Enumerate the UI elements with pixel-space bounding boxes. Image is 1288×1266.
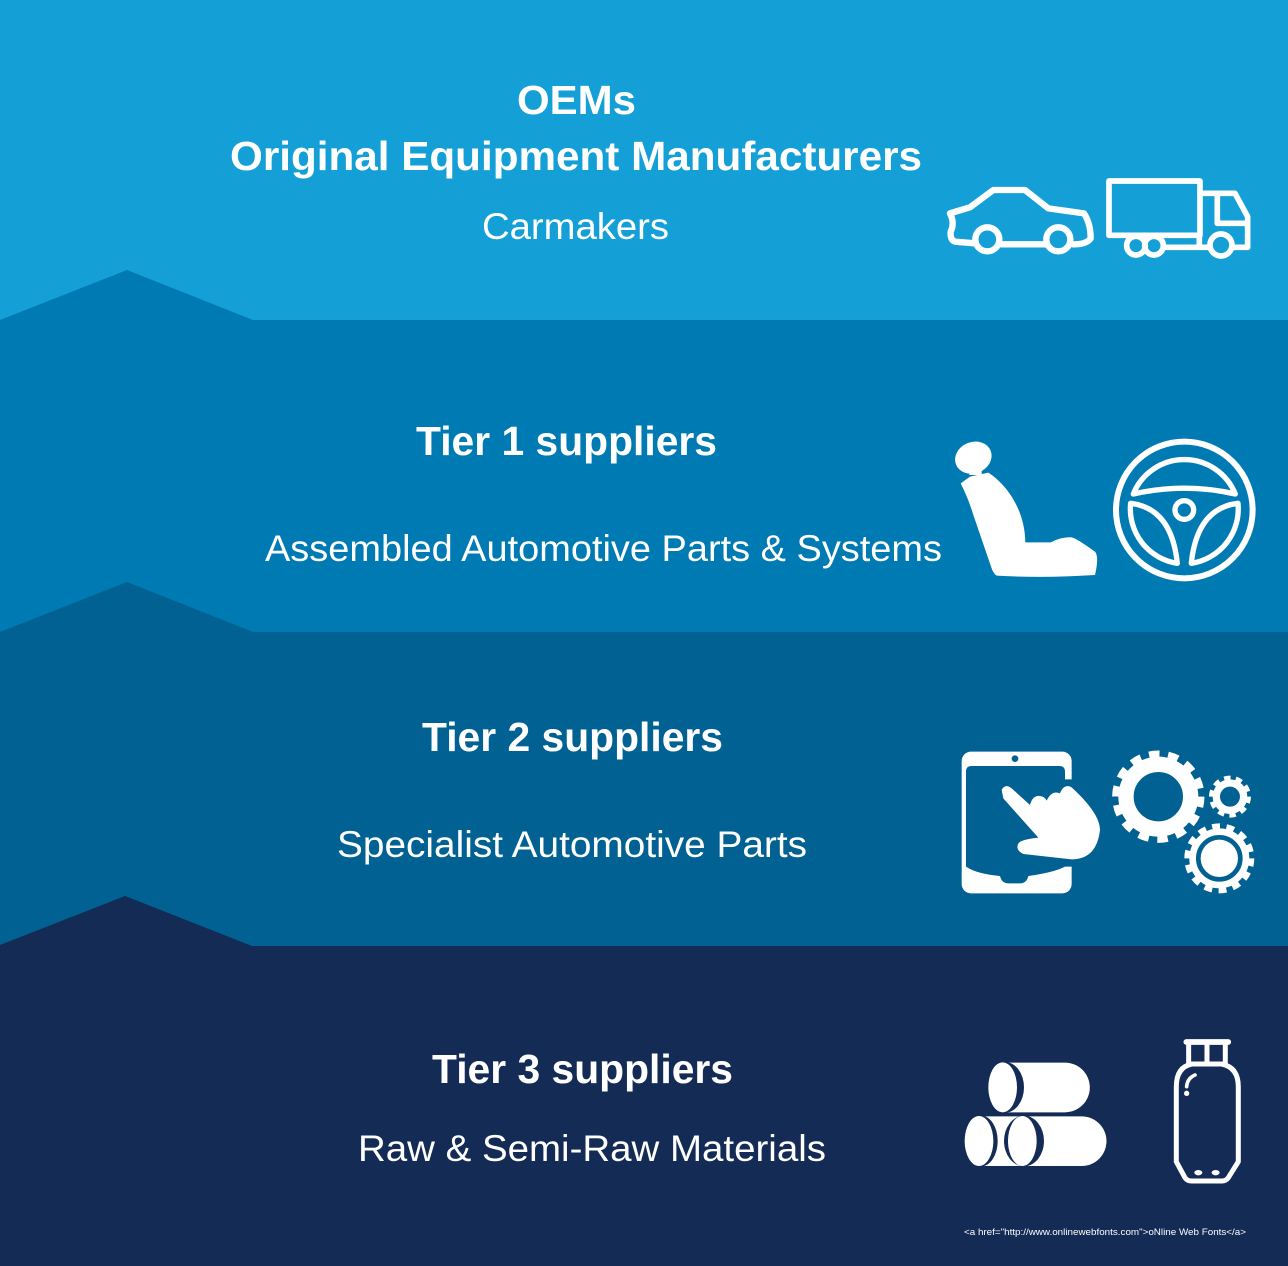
icon: steering wheel (1116, 442, 1253, 578)
text: Raw & Semi-Raw Materials: Raw & Semi-Raw Materials (358, 1128, 826, 1169)
band: Tier 1 background (0, 270, 1288, 640)
icon: tablet with pointing hand (962, 752, 1100, 893)
text: Carmakers: Carmakers (482, 206, 669, 247)
panel: Tier 1 suppliers (0, 270, 1288, 640)
heading: OEMs: OEMs (517, 77, 636, 123)
heading: Tier 3 suppliers: Tier 3 suppliers (432, 1046, 733, 1092)
text: icon credit: <a href="http://www.onlinewebfonts.com">oNline Web Fonts</a> (964, 1227, 1246, 1238)
icon: truck (1109, 181, 1248, 256)
panel: OEMs (0, 0, 1288, 330)
panel: Tier 3 suppliers (0, 896, 1288, 1266)
band: Tier 2 background (0, 582, 1288, 950)
heading: Original Equipment Manufacturers: Original Equipment Manufacturers (230, 133, 922, 179)
icon: car seat (950, 436, 1097, 577)
icon: metal cylinders (965, 1062, 1106, 1166)
icon: car (950, 190, 1091, 251)
panel: Tier 2 suppliers (0, 582, 1288, 950)
icon: gas bottle (1176, 1042, 1238, 1181)
band: Tier 3 background (0, 896, 1288, 1266)
band: OEMs background (0, 0, 1288, 330)
heading: Tier 2 suppliers: Tier 2 suppliers (422, 714, 723, 760)
heading: Tier 1 suppliers: Tier 1 suppliers (416, 418, 717, 464)
icon: gears (1116, 754, 1252, 891)
text: Assembled Automotive Parts & Systems: Assembled Automotive Parts & Systems (265, 528, 942, 569)
text: Specialist Automotive Parts: Specialist Automotive Parts (337, 824, 807, 865)
